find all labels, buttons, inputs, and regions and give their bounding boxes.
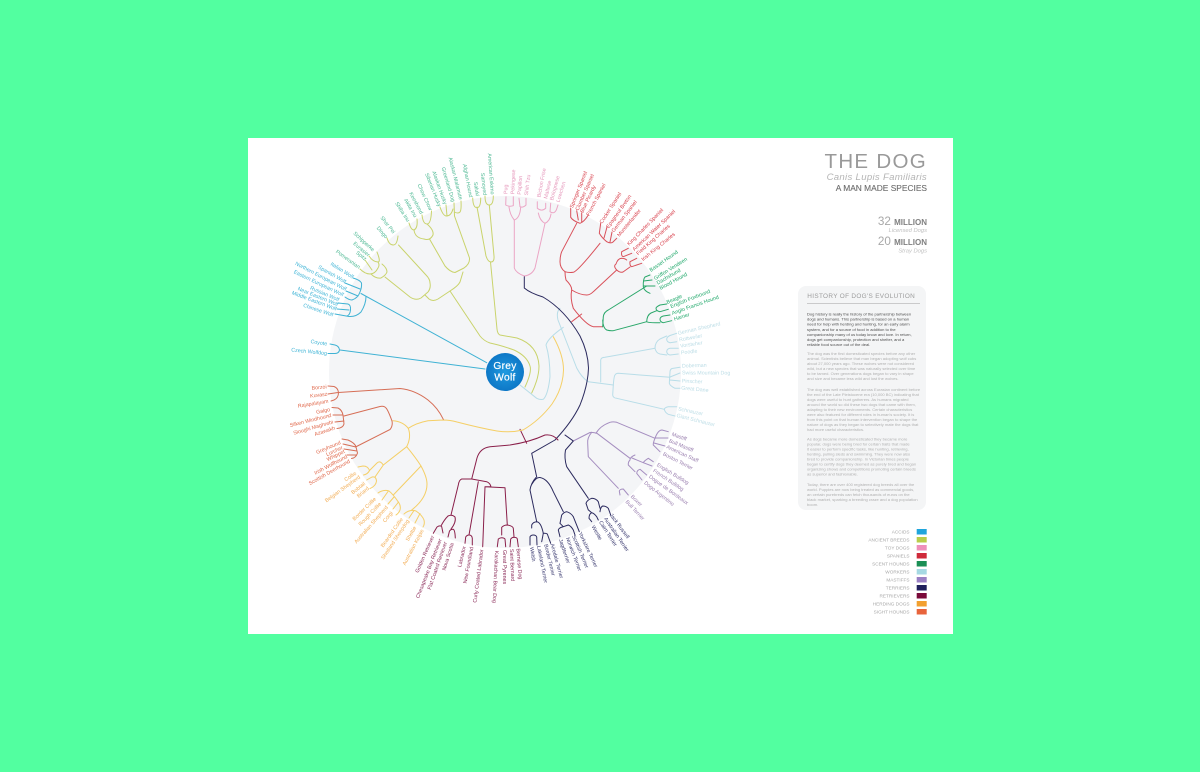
workers labels: Swiss Mountain Dog — [682, 370, 730, 377]
ancient breeds labels: Alaskan Husky — [430, 170, 448, 206]
clade: retrievers — [415, 429, 558, 603]
ancient breeds labels: Eurasier — [352, 241, 371, 259]
workers labels: Poodle — [681, 349, 698, 356]
ancient breeds labels: Keeshond — [407, 191, 424, 215]
legend labels: SIGHT HOUNDS — [874, 609, 910, 614]
clade: toy dogs — [503, 168, 568, 276]
herding dogs labels: Bearded Collie — [380, 517, 405, 549]
workers branch lines — [520, 308, 680, 416]
toy dogs labels: Shih Tzu — [524, 174, 532, 196]
clade: scent hounds — [603, 250, 720, 331]
wolves labels: Northern European Wolf — [294, 261, 348, 293]
lead paragraph: companionship many of us today know and love. In return, — [807, 332, 912, 337]
herding dogs labels: Sheltie — [405, 526, 418, 543]
statistic: licensed dogs — [878, 215, 927, 234]
scent hounds labels: Dachshund — [656, 268, 682, 286]
scent hounds labels: Anglo Francis Hound — [671, 295, 720, 317]
paragraph: today — [807, 482, 918, 507]
paragraph: today: black market, sparking a breeding craze and a dog population — [807, 497, 918, 502]
main title: THE DOG — [824, 150, 927, 173]
retrievers labels reading downward: Saint Bernard — [508, 549, 515, 581]
legend labels: TOY DOGS — [885, 545, 910, 550]
statistic: stray dogs: 20 MILLION — [878, 235, 927, 248]
terriers labels: Norwich Terrier — [564, 537, 582, 572]
herding dogs labels: Australian Shepherd — [354, 505, 390, 545]
herding dogs labels: Belgian Shepherd — [324, 475, 362, 504]
ancient breeds labels: Spitz — [354, 250, 368, 263]
legend — [868, 529, 927, 614]
spaniels labels: Munsterlander — [616, 208, 643, 238]
terriers labels: Cairn Terrier — [597, 520, 618, 548]
paragraph: migration: nature of dogs as they began to selectively mate the dogs that — [807, 422, 919, 427]
workers labels: German Shepherd — [677, 321, 721, 337]
herding dogs labels: Collie — [344, 471, 358, 483]
paragraph: migration: had more useful characteristics. — [807, 427, 864, 432]
spaniels labels: American Water Spaniel — [632, 209, 677, 253]
wolves labels: Coyote — [310, 339, 328, 348]
terriers labels: Jack Russell — [608, 513, 630, 540]
spaniels labels: French Spaniel — [586, 183, 608, 217]
spaniels labels: Blue Picardy — [579, 184, 598, 214]
mastiffs labels: Dogo Argentino — [643, 480, 675, 508]
terriers labels: Scottish Terrier — [570, 534, 589, 569]
spaniels labels — [569, 171, 677, 263]
paragraph: breeding — [807, 436, 916, 476]
paragraph: domestication: about 27,000 years ago. These wolves were not considered — [807, 361, 914, 366]
clade: workers — [520, 308, 730, 428]
toy dogs labels: Lowchen — [556, 181, 568, 203]
clade: sight hounds — [289, 384, 443, 487]
paragraph: domestication: wild, but a new species that was naturally selected over time — [807, 366, 916, 371]
ancient breeds labels: American Eskimo — [486, 153, 495, 195]
paragraph: domestication: to be tamed. Over generations dogs began to vary in shape — [807, 371, 914, 376]
legend labels: SCENT HOUNDS — [872, 561, 910, 566]
workers labels: Giant Schnauzer — [676, 413, 716, 428]
legend labels: ANCIENT BREEDS — [868, 537, 910, 542]
mastiffs labels: French Bulldog — [652, 468, 685, 493]
lead paragraph: dogs get companionship, protection and shelter, and a — [807, 337, 905, 342]
paragraph: breeding: it easier to perform specific tasks, like hunting, retrieving, — [807, 446, 909, 452]
paragraph: breeding: herding, pulling sleds and swimming. They were now also — [807, 452, 911, 456]
paragraph: domestication — [807, 351, 916, 381]
spaniels branch lines — [560, 208, 642, 327]
herding dogs labels: Corgi — [382, 511, 395, 524]
wolves labels: Near Eastern Wolf — [297, 286, 339, 308]
paragraph: migration: the end of the Late Pleistocene era (10,000 BC) indicating that — [807, 392, 920, 397]
sight hounds labels: Rajapalayam — [297, 399, 330, 410]
wolves labels — [291, 261, 355, 357]
wolves branch lines — [328, 278, 487, 369]
statistic: stray dogs: Stray Dogs — [898, 248, 927, 254]
clade: wolves — [291, 261, 487, 369]
mastiffs branch lines — [565, 422, 668, 495]
herding dogs labels: Briard — [356, 486, 371, 500]
wolves labels: Russian Wolf — [309, 285, 340, 304]
workers labels: Great Dane — [681, 386, 709, 394]
retrievers labels reading upward: New Foundland — [463, 546, 475, 584]
lead paragraph: need for help with herding and hunting, for an early alarm — [807, 322, 910, 327]
legend labels — [868, 529, 910, 614]
toy dogs labels: Pekingese — [510, 169, 517, 194]
ancient breeds labels: Dingo — [375, 226, 389, 240]
sight hounds branch lines — [328, 386, 443, 458]
paragraph: today: boom. — [807, 502, 818, 507]
herding dogs labels — [324, 471, 426, 567]
mastiffs labels: American Staff — [665, 444, 700, 465]
ancient breeds branch lines — [360, 196, 539, 393]
paragraph: domestication: and size and became less wild and lost the wolves. — [807, 376, 899, 381]
paragraph: migration: from this point on that human intervention began to shape the — [807, 417, 918, 422]
lead paragraph: Dog history is really the history of the partnership between — [807, 312, 911, 316]
toy dogs labels — [503, 168, 568, 203]
ancient breeds labels: Saluki — [472, 181, 480, 197]
terriers labels: Welsh — [528, 547, 536, 562]
sight hounds labels: Kuvasz — [310, 392, 328, 400]
spaniels labels: Clumber Spaniel — [575, 173, 596, 212]
herding dogs labels: Rough Collie — [358, 502, 383, 528]
paragraph: migration: were also featured for different roles in human's society. It is — [807, 412, 914, 417]
sight hounds labels: Lurcher — [325, 445, 344, 458]
workers labels: Schnauzer — [677, 406, 704, 417]
legend labels: WORKERS — [885, 569, 910, 574]
retrievers labels reading downward: Great Pyrenes — [501, 550, 507, 585]
spaniels labels: Cocker Spaniel — [599, 192, 623, 225]
paragraph: migration: The dog was well established across Eurasian continent before — [807, 387, 921, 392]
legend labels: TERRIERS — [886, 585, 910, 590]
central Grey Wolf node: Grey — [493, 361, 517, 372]
spaniels labels: Springer Spaniel — [569, 171, 589, 209]
scent hounds labels: Griffon Vendeen — [653, 257, 689, 282]
paragraph: breeding: organizing shows and competitions promoting certain breeds — [807, 466, 916, 472]
wolves labels: Chinese Wolf — [302, 303, 334, 319]
ancient breeds labels: Samoyed — [479, 173, 487, 196]
ancient breeds labels: Siberian Husky — [423, 172, 442, 208]
terriers labels: Australian Terrier — [602, 517, 630, 553]
retrievers labels reading upward: Labrador — [457, 546, 468, 568]
mastiffs labels: Boston Terrier — [662, 451, 694, 472]
ancient breeds labels: Shar Pei — [379, 215, 396, 235]
workers labels: Rottweiler — [679, 333, 703, 343]
legend labels: ACCIDS — [892, 529, 910, 534]
clade: ancient breeds — [334, 153, 539, 393]
lead paragraph: dogs and humans. This partnership is based on a human — [807, 317, 909, 322]
toy dogs labels: Maltese — [543, 180, 553, 199]
workers labels: Pinscher — [682, 378, 703, 385]
paragraph: migration: adapting to their new environments. Certain characteristics — [807, 407, 912, 412]
herding dogs labels: Border Collie — [352, 497, 378, 522]
paragraph: migration: around the world so did these two dogs that came with them, — [807, 402, 916, 407]
spaniels labels: King Charles Spaniel — [626, 208, 665, 247]
sight hounds labels: Borzoi — [311, 384, 327, 392]
scent hounds labels: Harrier — [673, 312, 691, 323]
spaniels labels: Field King Charles — [635, 223, 672, 257]
retrievers labels reading upward: Golden Retriever — [415, 535, 436, 574]
white poster panel — [248, 138, 953, 634]
lead paragraph: reliable food source out of the deal. — [807, 342, 870, 347]
sight hounds labels: Greyhound — [315, 440, 342, 456]
toy dogs branch lines — [506, 197, 558, 276]
wolves labels: Eastern European Wolf — [292, 269, 345, 299]
panel heading: HISTORY OF DOG'S EVOLUTION — [807, 293, 915, 300]
statistic: licensed dogs: Licensed Dogs — [889, 228, 927, 234]
paragraph: breeding: popular, dogs were being bred for certain traits that made — [807, 442, 910, 446]
terriers labels: Lakeland Terrier — [535, 545, 548, 584]
scent hounds labels — [649, 250, 720, 323]
title block — [824, 150, 927, 193]
subtitle: A MAN MADE SPECIES — [836, 183, 927, 193]
paragraph: today: Today, there are over 400 registered dog breeds all over the — [807, 482, 915, 487]
scent hounds labels: Blood Hound — [659, 272, 689, 292]
legend labels: HERDING DOGS — [873, 601, 910, 606]
clade: mastiffs — [565, 422, 700, 522]
toy dogs labels: Pug — [503, 185, 509, 194]
scent hounds labels: Basset Hound — [649, 250, 679, 274]
statistic: licensed dogs: 32 MILLION — [878, 215, 927, 228]
statistic: stray dogs — [878, 235, 927, 254]
retrievers labels reading upward — [415, 535, 485, 603]
sight hounds labels — [289, 384, 351, 487]
toy dogs labels: Bichon Frise — [536, 168, 548, 198]
paragraph: migration — [807, 387, 921, 432]
herding dogs labels: Australian Kelpie — [402, 529, 426, 567]
mastiffs labels — [624, 432, 700, 522]
central Grey Wolf node — [486, 353, 524, 391]
ancient breeds labels: Pomeranian — [334, 249, 361, 271]
spaniels labels: Irish King Charles — [641, 231, 677, 263]
terriers labels: Airedale Terrier — [549, 543, 564, 579]
wolves labels: Italian Wolf — [329, 261, 355, 281]
sight hounds labels: Sloughi Maghrebi — [293, 420, 334, 437]
paragraph: today: an certain purebreds can fetch thousands of euros on the — [807, 492, 910, 497]
workers labels: Doberman — [682, 363, 707, 370]
legend labels: SPANIELS — [887, 553, 910, 558]
mastiffs labels: Bull Terrier — [624, 499, 645, 522]
retrievers labels reading downward: Karakachan Bear Dog — [491, 551, 499, 603]
spaniels labels: German Spaniel — [611, 200, 639, 234]
mastiffs labels: Dogue de Bordeaux — [647, 474, 689, 507]
retrievers labels reading upward: Curly Coated Labrador — [472, 549, 485, 603]
sight hounds labels: Whippet — [326, 449, 347, 463]
herding dogs branch lines — [358, 337, 564, 527]
retrievers labels reading downward: Bernese Dog — [514, 548, 523, 580]
legend labels: MASTIFFS — [886, 577, 910, 582]
ancient breeds labels: Schipperke — [352, 231, 375, 253]
paragraph: breeding: As dogs became more domesticated they became more — [807, 436, 908, 442]
ancient breeds labels: Afghan Hound — [461, 164, 473, 198]
herding dogs labels: Bobtail — [350, 481, 367, 496]
terriers branch lines — [524, 277, 611, 545]
terriers labels: Yorkshire Terrier — [577, 531, 598, 569]
toy dogs labels: Papillon — [517, 176, 524, 195]
wolves labels: Middle Eastern Wolf — [291, 290, 338, 313]
ancient breeds labels: Alaskan Malamute — [447, 157, 463, 201]
mastiffs labels: Mastiff — [671, 432, 688, 443]
paragraph: migration: dogs were useful to hunt gatherers. As humans migrated — [807, 397, 908, 402]
panel: history of dog's evolution — [798, 286, 926, 510]
latin name: Canis Lupis Familiaris — [827, 172, 927, 183]
paragraph: today: world. Puppies are now being treated as commercial goods, — [807, 487, 914, 492]
herding dogs labels: Shetland Sheepdog — [380, 519, 411, 561]
wolves labels: Spanish Wolf — [317, 265, 347, 285]
scent hounds branch lines — [603, 275, 672, 331]
scent hounds labels: Beagle — [666, 294, 683, 306]
sight hounds labels: Scottish Deerhound — [308, 459, 351, 487]
sight hounds labels: Irish Wolfhound — [313, 454, 349, 477]
terriers labels: Border Terrier — [542, 544, 556, 577]
retrievers labels reading upward: Flat Coated Retriever — [427, 541, 449, 591]
retrievers labels reading upward: Chesapeake Bay Retriever — [415, 538, 444, 599]
paragraph: breeding: began to certify dogs they deemed as purely bred and began — [807, 462, 916, 466]
workers labels: Vorsteher — [680, 340, 703, 350]
ancient breeds labels — [334, 153, 495, 271]
wolves labels: Czech Wolfdog — [291, 347, 327, 357]
scent hounds labels: English Foxhound — [670, 289, 711, 310]
workers labels — [676, 321, 730, 428]
retrievers labels reading upward: Nova Scotia — [442, 542, 456, 571]
mastiffs labels: Bull Mastiff — [668, 438, 694, 454]
lead paragraph: system, and for a source of food in addition to the — [807, 327, 896, 332]
retrievers labels reading downward — [491, 548, 523, 603]
ancient breeds labels: Shiba Inu — [393, 201, 410, 223]
grey disc behind the tree — [329, 196, 681, 548]
clade: herding dogs — [324, 337, 564, 567]
ancient breeds labels: Akita Inu — [402, 198, 418, 219]
paragraph: breeding: as superior and fashionable. — [807, 472, 858, 476]
legend swatches — [917, 529, 927, 614]
terriers labels — [528, 513, 630, 584]
terriers labels: Westie — [590, 525, 603, 541]
lead paragraph — [807, 312, 912, 347]
toy dogs labels: Bolognese — [549, 175, 562, 201]
terriers labels: Jagdterrier — [557, 538, 571, 564]
retrievers labels — [415, 535, 523, 603]
sight hounds labels: Azawakh — [314, 426, 336, 438]
ancient breeds labels: Greenland Dog — [440, 167, 456, 203]
spaniels labels: Epagneul Breton — [605, 194, 633, 230]
clade: terriers — [524, 277, 630, 584]
paragraph: domestication: The dog was the first domesticated species before any other — [807, 351, 916, 356]
mastiffs labels: English Bulldog — [655, 462, 690, 486]
sight hounds labels: Silken Windhound — [289, 413, 332, 429]
paragraph: domestication: animal. Scientists believe that man began adopting wolf cubs — [807, 356, 916, 361]
ancient breeds labels: Chow Chow — [416, 183, 433, 212]
mastiffs labels: Boxer — [629, 494, 643, 508]
retrievers branch lines — [433, 429, 558, 547]
clade: spaniels — [560, 171, 677, 327]
legend labels: RETRIEVERS — [880, 593, 910, 598]
sight hounds labels: Galgo — [316, 407, 331, 416]
paragraph: breeding: bred to provide companionship. In Victorian times people — [807, 456, 910, 462]
central Grey Wolf node: Wolf — [494, 372, 516, 384]
